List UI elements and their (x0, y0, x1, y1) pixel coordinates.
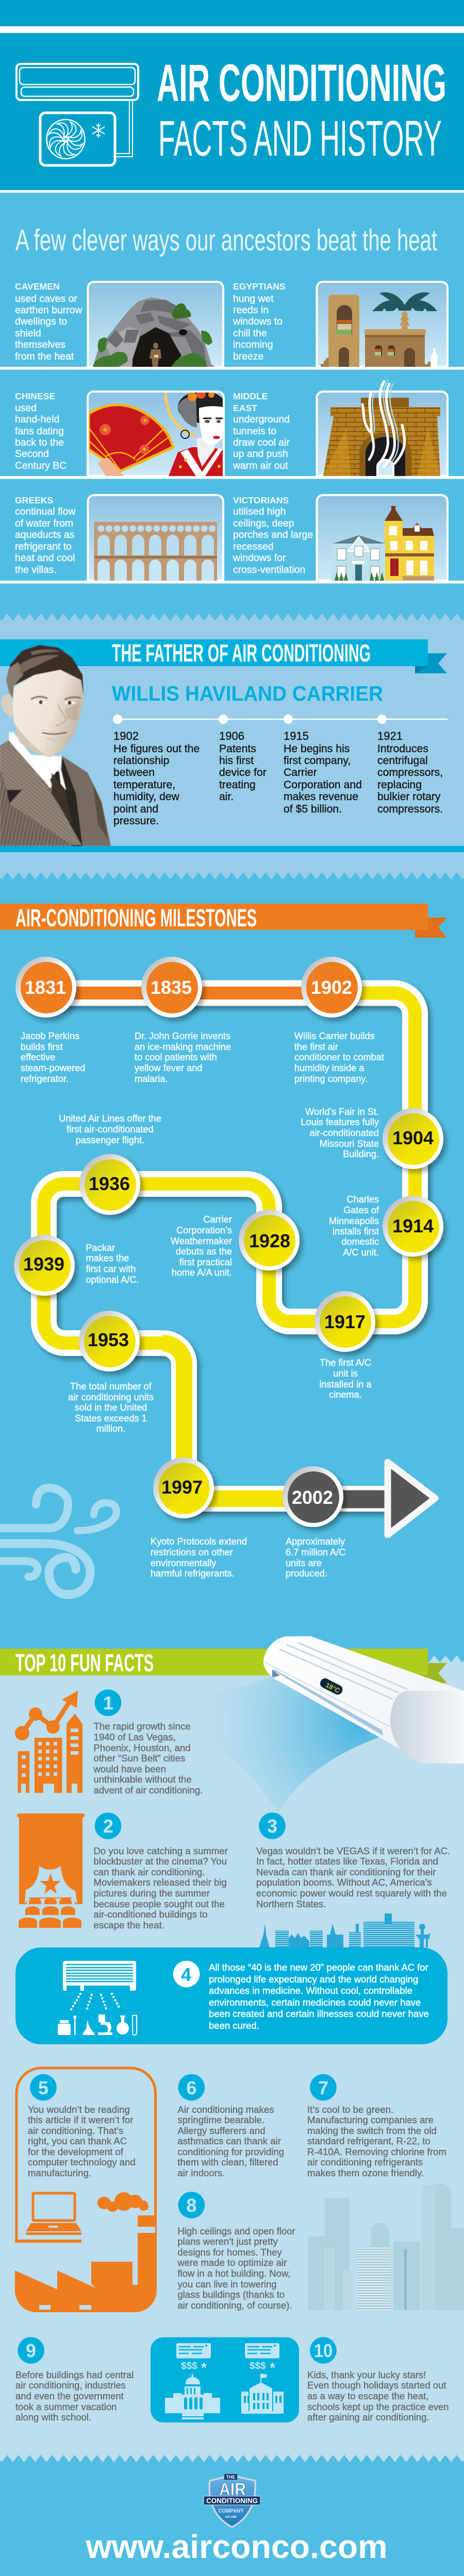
milestone: 1936 (79, 1154, 140, 1215)
text block: 1906: treating (219, 779, 256, 791)
text: 1953 note: States exceeds 1 (75, 1413, 147, 1423)
illustration: wall air conditioner (263, 1636, 464, 1764)
milestone: 1936: 1936 (89, 1173, 130, 1194)
text block: middle east: EAST (233, 403, 257, 413)
text: 1928 note: Corporation’s (176, 1225, 232, 1235)
fact 2: pictures during the summer (94, 1888, 210, 1899)
icon: school building: * (270, 2360, 275, 2376)
text block: chinese: Second (15, 448, 49, 460)
text: 1936 note: passenger flight. (76, 1135, 144, 1145)
text block: 1915: Carrier (284, 767, 317, 778)
text block: greeks: aqueducts as (15, 529, 74, 540)
icon: split air conditioner (16, 64, 138, 165)
fact 1: advent of air conditioning. (94, 1785, 203, 1795)
text block: 1921: 1921 (377, 730, 403, 742)
icon: ac and lab equipment (58, 1961, 137, 2035)
text block: 1902: relationship (113, 755, 169, 767)
milestone: 1997: 1997 (161, 1477, 203, 1498)
text block: greeks: GREEKS (15, 495, 54, 505)
text block: 1921: replacing (377, 779, 422, 791)
milestone: 1917: 1917 (324, 1311, 366, 1332)
milestone: 1914 (383, 1196, 443, 1257)
text: 1928 note: Weathermaker (171, 1236, 232, 1246)
fact 8: air conditioning, of course). (177, 2300, 292, 2311)
text: 2002 note: 6.7 million A/C (286, 1547, 345, 1557)
text block: egyptians: breeze (233, 351, 263, 362)
milestone: 1835 (141, 957, 202, 1018)
text block: cavemen: dwellings to (15, 316, 67, 327)
text block: 1902: 1902 (113, 730, 139, 742)
fact 6: conditioning for providing (177, 2146, 284, 2157)
fact 3 (256, 1812, 450, 1909)
text block: 1921: Introduces (377, 743, 428, 755)
panel: egyptian buildings illustration (317, 282, 448, 367)
fact 3: Vegas wouldn’t be VEGAS if it weren’t for AC. (256, 1845, 450, 1856)
logo: air conditioning company: CONDITIONING (206, 2497, 258, 2505)
milestone: 1928: 1928 (249, 1230, 290, 1251)
text: 1928 note: home A/A unit. (172, 1267, 232, 1278)
milestone: 1831: 1831 (25, 977, 66, 998)
text block: chinese: hand-held (15, 414, 59, 425)
fact 2 (94, 1812, 228, 1930)
milestone: 1835: 1835 (151, 977, 192, 998)
panel: fact 5: right, you can thank AC (28, 2136, 127, 2146)
divider line row one (0, 367, 464, 370)
text: 2002 note: produced. (286, 1568, 327, 1579)
text block: 1915: Corporation and (284, 779, 362, 791)
text block: greeks: of water from (15, 518, 73, 529)
text: 1953 note: million. (96, 1423, 125, 1434)
milestone: 2002 (283, 1466, 343, 1527)
text block: greeks: refrigerant to (15, 541, 72, 552)
fact 7: Manufacturing companies are (307, 2114, 434, 2125)
text block: 1902: humidity, dew (113, 791, 180, 803)
milestone: 2002: 2002 (292, 1487, 333, 1508)
text block: middle east: MIDDLE (233, 391, 268, 401)
timeline track (44, 993, 415, 1499)
panel: fact 5: You wouldn’t be reading (28, 2104, 130, 2115)
fact 2: blockbuster at the cinema? You (94, 1856, 227, 1867)
panel: fact 4: prolonged life expectancy and the world changing (209, 1974, 418, 1985)
fact 8: flow in a hot building. Now, (177, 2268, 290, 2279)
logo: air conditioning company: THE (226, 2475, 235, 2480)
logo: air conditioning company: COMPANY (219, 2508, 244, 2514)
text block: victorians: windows for (233, 552, 286, 564)
text: 1835 note: yellow fever and (135, 1063, 202, 1073)
fact 7 (307, 2074, 446, 2178)
text: 1914 note: installs first (333, 1226, 379, 1236)
text: 1997 note: harmful refrigerants. (151, 1568, 235, 1579)
heading: top 10 fun facts: TOP 10 FUN FACTS (15, 1650, 154, 1677)
text block: cavemen (15, 281, 82, 362)
text: 1831 note: builds first (21, 1042, 63, 1052)
text block: 1921: compressors. (377, 803, 443, 815)
panel: victorian houses illustration (317, 495, 448, 581)
icon: factory (15, 2192, 157, 2312)
text: 2002 note: units are (286, 1558, 322, 1568)
fact 9 (15, 2337, 134, 2422)
fact 10: 10 (314, 2340, 333, 2361)
text: 1902 note: printing company. (294, 1074, 368, 1084)
panel: fact 5: 5 (38, 2077, 48, 2098)
header band (0, 0, 464, 193)
text block: cavemen: themselves (15, 339, 65, 350)
icon: capitol building: $$$ (181, 2361, 197, 2371)
section: top 10 background (0, 1655, 464, 2462)
text block: egyptians (233, 281, 286, 362)
text: 2002 note: Approximately (286, 1536, 345, 1547)
fact 1: would have been (93, 1764, 166, 1774)
text: 1997 note: restrictions on other (151, 1547, 233, 1557)
icon: capitol building (165, 2343, 220, 2419)
text: 1902 note: Willis Carrier builds (294, 1031, 375, 1041)
text block: victorians (233, 495, 313, 575)
milestone: 1928 (239, 1210, 300, 1270)
text: 1928 note: Carrier (203, 1214, 232, 1225)
text block: egyptians: chill the (233, 328, 267, 339)
text block: middle east: underground (233, 414, 290, 425)
fact 3: In fact, hotter states like Texas, Florida and (256, 1856, 438, 1867)
fact 7: standard refrigerant, R-22, to (307, 2136, 430, 2146)
title (157, 54, 446, 166)
text block: 1902: temperature, (113, 779, 175, 791)
panel: government and school cooling icons (151, 2337, 299, 2422)
air flow from unit (169, 1676, 382, 1812)
text block: 1902: point and (113, 803, 158, 815)
text block: greeks: continual flow (15, 506, 76, 517)
panel: fact 5: manufacturing. (28, 2167, 91, 2178)
fact 9: took a summer vacation (15, 2401, 117, 2412)
text: 1997 note: environmentally (151, 1558, 217, 1568)
text: 1835 note: to cool patients with (135, 1052, 217, 1062)
text block: cavemen: shield (15, 328, 41, 339)
fact 3: economic power would rest squarely with the (256, 1888, 447, 1899)
text block: egyptians: windows to (233, 316, 283, 327)
panel: fact 5 (15, 2068, 157, 2312)
text block: middle east: tunnels to (233, 426, 276, 437)
text: 1904 note: air-conditionated (310, 1128, 379, 1138)
milestone: 1831 (15, 957, 76, 1018)
text: 1914 note: A/C unit. (343, 1247, 379, 1258)
fact 2: escape the heat. (94, 1920, 164, 1930)
text block: victorians: recessed (233, 541, 274, 552)
text block: cavemen: from the heat (15, 351, 74, 362)
portrait: Willis Carrier (0, 645, 111, 846)
text block: 1921: bulkier rotary (377, 791, 441, 803)
text: 1835 note: malaria. (135, 1074, 168, 1084)
text: 1902 note: conditioner to combat (294, 1052, 384, 1062)
text: 1917 note: The first A/C (320, 1358, 371, 1368)
ribbon banner: top 10 (0, 1649, 447, 1683)
fact 7: 7 (318, 2077, 328, 2098)
fact 6: air indoors. (177, 2167, 225, 2178)
timeline: carrier dates (113, 715, 448, 724)
text block: cavemen: used caves or (15, 293, 77, 304)
text: 1939 note: makes the (86, 1253, 129, 1263)
text block: 1906: 1906 (219, 730, 244, 742)
fact 2: Do you love catching a summer (94, 1845, 228, 1856)
fact 7: air conditioning refrigerants (307, 2157, 423, 2167)
text: 1939 note: first car with (86, 1264, 136, 1274)
icon: cinema (17, 1814, 85, 1928)
milestone: 1953: 1953 (88, 1329, 129, 1350)
fact 9: Before buildings had central (15, 2369, 134, 2380)
divider line row two (0, 476, 464, 479)
heading: Willis Haviland Carrier: WILLIS HAVILAND CARRIER (112, 682, 383, 705)
text: 1928 note: first practical (179, 1257, 232, 1267)
fact 8: plans weren’t just pretty (177, 2236, 278, 2247)
logo: air conditioning company (204, 2474, 260, 2527)
text: 1904 note: Building. (343, 1149, 379, 1159)
fact 6: 6 (186, 2077, 196, 2098)
fact 7: makes them ozone friendly. (307, 2167, 424, 2178)
fact 2: because people sought out the (94, 1899, 225, 1909)
text block: 1902: He figures out the (113, 743, 200, 755)
text block: chinese: back to the (15, 437, 64, 448)
text block: 1921: compressors, (377, 767, 443, 778)
text block: chinese (15, 391, 67, 471)
text block: victorians: porches and large (233, 529, 313, 540)
panel: fact 4: environments, certain medicines could never have (209, 1997, 421, 2008)
fact 10: Kids, thank your lucky stars! (307, 2369, 426, 2380)
fact 1: The rapid growth since (94, 1721, 191, 1732)
panel: cave illustration (88, 282, 223, 367)
text: 1914 note: Minneapolis (329, 1216, 379, 1226)
text block: 1906: Patents (219, 743, 256, 755)
fact 6 (177, 2074, 284, 2178)
fact 8 (177, 2192, 295, 2311)
ribbon banner: milestones (0, 904, 447, 938)
icon: school building (241, 2343, 284, 2414)
text block: cavemen: CAVEMEN (15, 281, 60, 292)
text block: greeks: heat and cool (15, 552, 75, 564)
text: 1997 note: Kyoto Protocols extend (151, 1536, 247, 1547)
text block: chinese: CHINESE (15, 391, 55, 401)
text: 1831 note: steam-powered (21, 1063, 85, 1073)
text block: 1906: his first (219, 755, 254, 767)
text: 1904 note: Louis features fully (301, 1117, 379, 1127)
milestone: 1904: 1904 (392, 1127, 434, 1148)
milestone: 1939: 1939 (23, 1253, 64, 1275)
text: 1917 note: unit is (333, 1368, 358, 1379)
panel: fact 5: this article if it weren’t for (28, 2114, 134, 2125)
text block: cavemen: earthen burrow (15, 304, 82, 316)
fact 6: Allergy sufferers and (177, 2125, 266, 2136)
illustration: wall air conditioner: 18°C (324, 1681, 341, 1694)
fact 1: unthinkable without the (94, 1774, 192, 1785)
text: 1917 note: cinema. (329, 1389, 362, 1400)
divider line row three (0, 581, 464, 583)
fact 1: other “Sun Belt” cities (94, 1753, 185, 1764)
text block: 1915: 1915 (284, 730, 309, 742)
milestone: 1917 (314, 1291, 375, 1352)
text: 1835 note: Dr. John Gorrie invents (135, 1031, 230, 1041)
fact 8: 8 (186, 2195, 196, 2216)
fact 10: after gaining air conditioning. (307, 2412, 429, 2422)
fact 9: 9 (26, 2340, 36, 2361)
text: 1939 note: optional A/C. (86, 1275, 139, 1285)
milestone: 1914: 1914 (392, 1215, 434, 1236)
text: 1953 note: The total number of (70, 1381, 152, 1392)
icon: laptop (26, 2193, 81, 2235)
text block: 1915: He begins his (284, 743, 350, 755)
fact 7: R-410A. Removing chlorine from (307, 2146, 446, 2157)
text block: chinese: used (15, 402, 37, 414)
text block: 1906: air. (219, 791, 234, 803)
section: father of air conditioning background (0, 614, 464, 879)
text: 1831 note: Jacob Perkins (21, 1031, 79, 1041)
text block: victorians: cross-ventilation (233, 564, 305, 575)
fact 7: It’s cool to be green. (307, 2104, 393, 2115)
fact 1: 1940 of Las Vegas, (94, 1732, 176, 1742)
milestone: 1902 (301, 957, 362, 1018)
text block: 1902: between (113, 767, 155, 778)
text: 1835 note: an ice-making machine (135, 1042, 231, 1052)
illustration: glass building skyline (308, 2183, 464, 2310)
fact 3: Northern States. (256, 1899, 326, 1909)
milestone: 1939 (14, 1235, 75, 1296)
fact 8: were made to optimize air (177, 2257, 287, 2268)
text block: 1902: pressure. (113, 815, 159, 827)
text block: 1915: of $5 billion. (284, 803, 342, 815)
text: 1953 note: sold in the United (75, 1402, 147, 1413)
text block: chinese: Century BC (15, 460, 67, 471)
text block: middle east (233, 391, 290, 471)
fact 1: Phoenix, Houston, and (94, 1742, 191, 1753)
fact 10: as a way to escape the heat, (307, 2391, 429, 2401)
fact 6: asthmatics can thank air (177, 2136, 281, 2146)
panel: fact 4: advances in medicine. Without cool, controllable (209, 1985, 412, 1996)
fact 1 (93, 1689, 203, 1795)
panel: fact 5: for the development of (28, 2146, 124, 2157)
text block: egyptians: EGYPTIANS (233, 281, 286, 292)
text block: 1915: first company, (284, 755, 351, 767)
fact 1: 1 (103, 1692, 113, 1714)
text block: chinese: fans dating (15, 426, 64, 437)
fact 3: Nevada can thank air conditioning for their (256, 1867, 436, 1877)
text block: 1906: device for (219, 767, 267, 778)
panel: fact 5: air conditioning. That’s (28, 2125, 123, 2136)
website url: www.airconco.com (85, 2528, 387, 2565)
milestone: 1904 (383, 1108, 443, 1169)
icon: school building: $$$ (250, 2361, 266, 2371)
text: 1831 note: refrigerator. (21, 1074, 69, 1084)
text: 1939 note: Packar (86, 1243, 115, 1253)
icon: capitol building: * (201, 2360, 207, 2376)
text: 1914 note: Charles (346, 1194, 379, 1205)
fact 8: you can live in towering (177, 2279, 277, 2290)
fact 8: designs for homes. They (177, 2247, 282, 2258)
text block: middle east: draw cool air (233, 437, 290, 448)
logo: air conditioning company: AIR (219, 2480, 246, 2499)
fact 2: air-conditioned buildings to (94, 1909, 208, 1920)
icon: wind swirls (0, 1488, 117, 1595)
panel: fact 5: computer technology and (28, 2157, 136, 2167)
text block: victorians: ceilings, deep (233, 518, 294, 529)
text: 1904 note: Missouri State (320, 1139, 379, 1149)
milestone: 1997 (153, 1458, 214, 1518)
panel: fact 4 (15, 1947, 448, 2044)
panel: fact 4: All those “40 is the new 20” people can thank AC for (209, 1962, 428, 1973)
fact 2: Moviemakers released their big (94, 1877, 227, 1888)
fact 6: Air conditioning makes (177, 2104, 274, 2115)
text: 1902 note: humidity inside a (294, 1063, 364, 1073)
fact 9: air conditioning, industries (15, 2380, 126, 2391)
text: 1831 note: effective (21, 1052, 55, 1062)
text: 1904 note: World’s Fair in St. (305, 1107, 379, 1117)
panel: middle east wind tower illustration (317, 380, 448, 476)
fact 10: Even though holidays started out (307, 2380, 446, 2391)
fact 10: schools kept up the practice even (307, 2401, 449, 2412)
text block: greeks: the villas. (15, 564, 57, 575)
text block: middle east: warm air out (233, 460, 288, 471)
fact 2: 2 (103, 1816, 113, 1837)
fact 6: them with clean, filtered (177, 2157, 278, 2167)
milestone: 1953 (79, 1311, 140, 1371)
fact 6: springtime bearable. (177, 2114, 264, 2125)
text block: 1921: centrifugal (377, 755, 428, 767)
text: 1914 note: domestic (341, 1236, 379, 1247)
text: 1936 note: United Air Lines offer the (59, 1113, 161, 1124)
heading: air-conditioning milestones: AIR-CONDITIONING MILESTONES (15, 905, 257, 932)
logo: air conditioning company: EST.1986 (225, 2516, 237, 2519)
panel: fact 4: been created and certain illnesses could never have (209, 2008, 429, 2019)
fact 8: High ceilings and open floor (177, 2226, 295, 2236)
fact 8: glass buildings (thanks to (177, 2289, 285, 2300)
fact 2: can thank air conditioning. (94, 1867, 205, 1877)
text block: middle east: up and push (233, 448, 288, 460)
fact 9: along with school. (15, 2412, 91, 2422)
fact 9: and even the government (15, 2391, 124, 2401)
panel: aqueduct illustration (88, 495, 223, 581)
fact 10 (307, 2337, 449, 2422)
milestone: 1902: 1902 (311, 977, 352, 998)
text block: egyptians: reeds in (233, 304, 269, 316)
fact 3: 3 (267, 1816, 277, 1837)
text block: victorians: VICTORIANS (233, 495, 289, 505)
text: 1928 note: debuts as the (176, 1246, 232, 1257)
text block: egyptians: incoming (233, 339, 273, 350)
panel: fact 4: been cured. (209, 2020, 259, 2031)
text: 1936 note: first air-conditionated (67, 1124, 154, 1134)
icon: growing city (15, 1691, 82, 1793)
text: 1902 note: the first air (294, 1042, 338, 1052)
panel: fact 4: 4 (181, 1964, 191, 1985)
text: 1917 note: installed in a (319, 1379, 372, 1389)
text block: egyptians: hung wet (233, 293, 274, 304)
text block: greeks (15, 495, 76, 575)
text block: 1915: makes revenue (284, 791, 358, 803)
panel: chinese fan illustration (88, 389, 226, 476)
fact 3: population booms. Without AC, America’s (256, 1877, 432, 1888)
ribbon banner: father (0, 639, 447, 673)
arrow head (388, 1462, 435, 1535)
text block: victorians: utilised high (233, 506, 286, 517)
text: 1914 note: Gates of (343, 1205, 379, 1215)
fact 7: making the switch from the old (307, 2125, 437, 2136)
illustration: las vegas skyline (259, 1913, 430, 1947)
text: 1953 note: air conditioning units (68, 1392, 154, 1402)
